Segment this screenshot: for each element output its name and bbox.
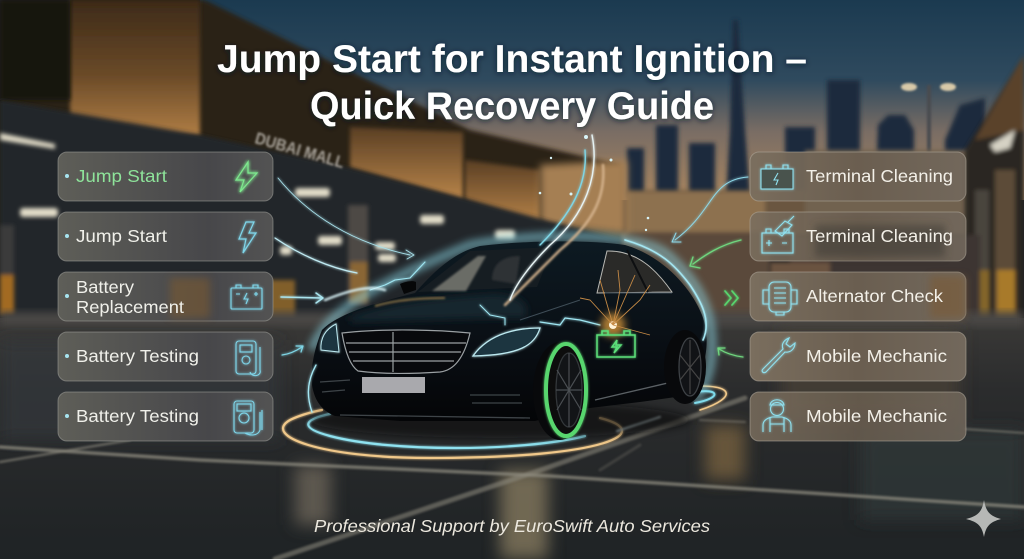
grille: [342, 330, 470, 373]
arrow: jump start 1: [278, 178, 414, 259]
icon: wrench: [762, 338, 795, 373]
aura glow around car: [312, 236, 712, 400]
panel: jump start green: [58, 152, 273, 201]
panel: jump start: [58, 212, 273, 261]
panel: mobile mechanic 2: [750, 392, 966, 441]
panel: battery testing 2: Battery Testing: [76, 406, 199, 426]
floor lines: [0, 398, 1024, 559]
footer credit: Professional Support by EuroSwift Auto Services: [314, 516, 710, 536]
title: Jump Start for Instant Ignition –: [217, 38, 807, 81]
sign text: DUBAI MALL: [253, 129, 347, 172]
title: [217, 38, 807, 128]
hood sheen: [350, 294, 526, 322]
arrow: alternator chevrons: [725, 291, 738, 305]
icon: sparkle watermark: [966, 500, 1001, 537]
icon: multimeter: [236, 341, 260, 376]
panel: battery testing 2: [58, 392, 273, 441]
arrow: mobile mechanic: [718, 348, 743, 357]
panel: battery testing 1: Battery Testing: [76, 346, 199, 366]
panel: battery replacement: Battery: [76, 277, 134, 297]
icon: multimeter with probes: [234, 401, 262, 435]
ceiling lights: [0, 133, 515, 262]
lower bumper: [320, 380, 530, 418]
sill highlight: [595, 382, 672, 400]
dark left ceiling and building: [0, 0, 620, 300]
reflections: [0, 330, 1024, 559]
panel: jump start: Jump Start: [76, 226, 167, 246]
car: [310, 241, 707, 440]
icon: battery: [231, 285, 262, 309]
skyline: [627, 20, 985, 200]
arrow: battery replacement: [281, 293, 323, 303]
side windows: [597, 251, 672, 293]
panel: mobile mechanic 1: [750, 332, 966, 381]
street lamp: [901, 83, 956, 155]
side mirror: [400, 281, 416, 294]
distant lit building: [620, 150, 975, 332]
ground shadow: [310, 402, 690, 438]
windshield: [418, 247, 553, 292]
license plate: [362, 377, 425, 393]
ground energy rings: [283, 386, 726, 458]
body: [312, 241, 707, 421]
icon: green lightning: [236, 162, 257, 192]
headlights: [473, 328, 540, 356]
panel: terminal cleaning 1: [750, 152, 966, 201]
pillars and yellow bases: [0, 205, 368, 320]
arrow: jump start 2: [275, 238, 357, 273]
icon: battery with brush: [762, 216, 794, 253]
panel: terminal cleaning 2: Terminal Cleaning: [806, 226, 953, 246]
arrows towards car: [275, 177, 748, 357]
wet ground: [0, 318, 1024, 559]
lightning and energy streaks: [308, 135, 706, 412]
panel: jump start green: Jump Start: [76, 166, 167, 186]
arrow: terminal cleaning 1: [672, 177, 748, 242]
icon: mechanic person: [763, 400, 791, 432]
sky: [200, 0, 1024, 200]
icon: alternator: [763, 282, 797, 315]
icon: blue lightning: [239, 222, 256, 253]
panel: battery replacement: [58, 272, 273, 321]
panel: battery testing 1: [58, 332, 273, 381]
arrow: terminal cleaning 2: [690, 240, 741, 268]
panel: mobile mechanic 1: Mobile Mechanic: [806, 346, 947, 366]
title: Quick Recovery Guide: [310, 85, 714, 128]
panel: battery replacement: Replacement: [76, 297, 184, 317]
right structure: [770, 55, 1024, 330]
spark and battery icon on car: [580, 270, 650, 357]
panel: alternator check: [750, 272, 966, 321]
panel: mobile mechanic 2: Mobile Mechanic: [806, 406, 947, 426]
panel: alternator check: Alternator Check: [806, 286, 943, 306]
rear wheel: [664, 330, 706, 404]
front wheel with green ring: [533, 342, 587, 440]
arrow: battery testing: [282, 346, 303, 355]
panel: terminal cleaning 1: Terminal Cleaning: [806, 166, 953, 186]
icon: battery: [761, 165, 793, 189]
panel: terminal cleaning 2: [750, 212, 966, 261]
